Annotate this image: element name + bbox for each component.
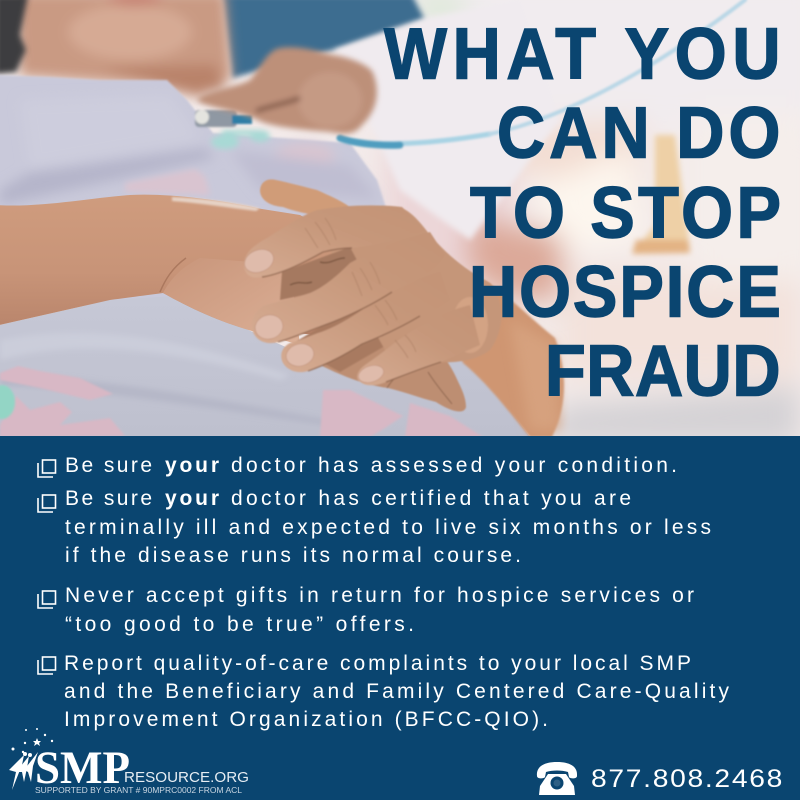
item 4 text: Improvement Organization (BFCC-QIO).: [64, 708, 548, 731]
finger 2: [252, 232, 445, 343]
finger 4: [357, 305, 480, 385]
patient's left arm and palm: [0, 195, 345, 335]
item 2 text: terminally ill and expected to live six months or less: [65, 516, 711, 539]
panel: action list background: [0, 436, 800, 800]
item 1 text: Be sure: [65, 454, 152, 477]
knuckle shadow area: [280, 247, 358, 300]
forearm at right: [461, 279, 566, 436]
item 3 text: [65, 584, 694, 636]
title: TO STOP: [470, 172, 781, 253]
icon: checkbox 1: [38, 460, 56, 477]
blue pillow: [222, 0, 425, 78]
patient's right hand: [241, 179, 501, 411]
icon: checkbox 2: [38, 495, 56, 512]
thumb: [260, 179, 350, 218]
logo URL: RESOURCE.ORG: [124, 769, 249, 786]
icon: checkbox 3: [38, 591, 56, 608]
phone number: 877.808.2468: [591, 765, 784, 793]
patient's hair: [0, 0, 28, 74]
item 3 text: “too good to be true” offers.: [65, 613, 414, 636]
title: HOSPICE: [469, 251, 781, 332]
item 2 text: if the disease runs its normal course.: [65, 544, 521, 567]
photo: patient's hands held in hospice bed: [0, 0, 800, 445]
logo wordmark: SMP: [35, 742, 130, 794]
title: WHAT YOU: [384, 13, 781, 94]
fingernails: [241, 245, 386, 386]
doctor's hand: [197, 47, 377, 134]
tan bedding fold: [632, 135, 690, 254]
item 2 text: Be sure: [65, 487, 152, 510]
doctor's coat: [335, 0, 560, 240]
arm skin highlight: [172, 197, 260, 211]
logo: SMP Resource: [9, 728, 249, 795]
patient's face and neck: [15, 0, 232, 98]
icon: telephone: [537, 762, 577, 795]
palm side of hand: [163, 258, 300, 345]
item 4 text: Report quality-of-care complaints to your local SMP: [64, 652, 691, 675]
title: CAN DO: [497, 92, 780, 173]
blurred bedding background: [385, 0, 800, 445]
item 2 text: doctor has certified that you are: [231, 487, 631, 510]
finger 1: [246, 204, 404, 277]
title: FRAUD: [545, 330, 781, 411]
wrist crease: [160, 258, 186, 292]
title: [384, 13, 781, 411]
item 3 text: Never accept gifts in return for hospice services or: [65, 584, 694, 607]
back of hand: [330, 207, 501, 362]
logo figures and stars: [9, 728, 53, 790]
item 1 text: your: [165, 454, 219, 477]
chestpiece: [195, 110, 252, 127]
stethoscope teal ring: [211, 130, 270, 149]
finger 3: [280, 310, 378, 373]
item 4 text: [64, 652, 730, 731]
shadow fill between fingers: [298, 308, 383, 372]
gown teal pattern: [0, 385, 15, 419]
item 2 text: [65, 487, 711, 567]
grant line: SUPPORTED BY GRANT # 90MPRC0002 FROM ACL: [35, 785, 242, 795]
icon: checkbox 4: [38, 657, 56, 674]
gown pink pattern: [0, 366, 483, 437]
finger creases: [262, 248, 441, 382]
lower gown: [0, 296, 530, 437]
item 2 text: your: [165, 487, 219, 510]
lower fingers beneath: [322, 346, 467, 412]
stethoscope tube: [340, 0, 745, 145]
gown pink stripes: [125, 169, 210, 195]
item 1 text: doctor has assessed your condition.: [231, 454, 677, 477]
item 4 text: and the Beneficiary and Family Centered Care-Quality: [64, 680, 730, 703]
upper gown: [0, 75, 420, 310]
